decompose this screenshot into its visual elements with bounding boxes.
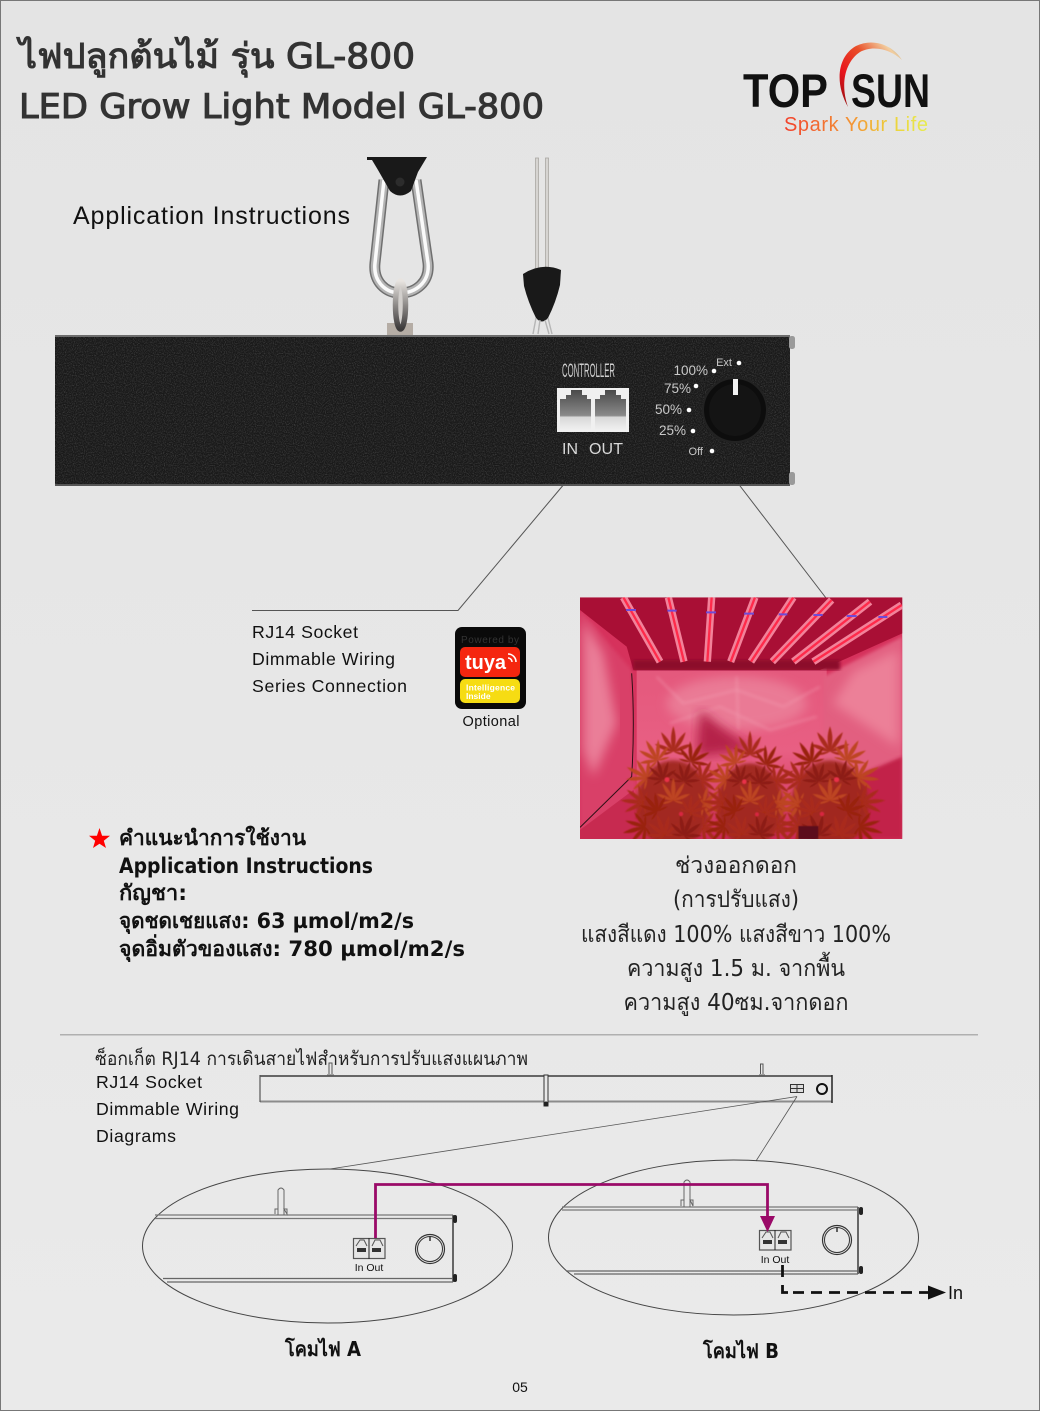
icon: rope ratchet hanger xyxy=(523,158,561,334)
sockets B xyxy=(760,1230,791,1266)
cannabis plants xyxy=(620,726,885,839)
controller sockets: IN xyxy=(562,441,578,458)
zoom lines from overview xyxy=(330,1096,797,1169)
diagram: lamp B detail xyxy=(548,1160,918,1315)
label: lamp B: โคมไฟ B xyxy=(702,1339,779,1363)
application instructions text: กัญชา: xyxy=(119,881,187,906)
flowering settings text: ช่วงออกดอก xyxy=(675,853,797,879)
flowering settings text xyxy=(581,853,891,1016)
diagram: lamp A detail xyxy=(142,1169,512,1323)
flowering settings text: แสงสีแดง 100% แสงสีขาว 100% xyxy=(581,922,891,948)
badge: tuya powered: Intelligence xyxy=(466,682,515,692)
product: light bar end panel xyxy=(55,335,795,486)
dimmer scale labels xyxy=(655,357,732,458)
arrow: dashed output to next lamp: In xyxy=(948,1283,963,1303)
logo: Topsun xyxy=(743,42,930,136)
badge: tuya powered: Inside xyxy=(466,691,491,701)
dimmer scale labels: Off xyxy=(689,446,704,458)
dimmer scale labels: 75% xyxy=(664,381,691,396)
back wall xyxy=(637,663,827,839)
controller sockets: OUT xyxy=(589,441,623,458)
badge: tuya powered: tuya xyxy=(465,652,507,674)
heading: application instructions: Application Instructions xyxy=(73,202,350,230)
application instructions text xyxy=(119,825,465,963)
dimmer scale labels: Ext xyxy=(716,357,732,369)
label: lamp A: โคมไฟ A xyxy=(284,1337,361,1361)
icon: hanging carabiner xyxy=(367,157,428,335)
dimmer scale labels: 25% xyxy=(659,423,686,438)
dimmer scale labels: 50% xyxy=(655,402,682,417)
knob B xyxy=(822,1226,852,1254)
dimmer knob xyxy=(703,378,767,442)
knob A xyxy=(416,1234,444,1264)
LED light bars xyxy=(623,597,902,662)
logo: Topsun: Spark Your Life xyxy=(784,114,928,136)
socket features text xyxy=(252,622,407,696)
title: LED Grow Light Model GL-800 xyxy=(19,87,544,127)
dimmer scale labels: 100% xyxy=(673,363,708,378)
ceiling xyxy=(580,597,902,670)
leader lines to sockets and photo xyxy=(252,482,826,610)
wiring diagram heading: Dimmable Wiring xyxy=(96,1099,239,1119)
bolts xyxy=(789,336,795,485)
title xyxy=(16,36,544,127)
socket features text: Dimmable Wiring xyxy=(252,649,395,669)
arrow: purple link from lamp A out to lamp B in xyxy=(376,1184,775,1238)
application instructions text: Application Instructions xyxy=(119,854,373,878)
application instructions text: คำแนะนำการใช้งาน xyxy=(119,825,307,850)
wiring diagram heading: Diagrams xyxy=(96,1126,176,1146)
badge: tuya powered xyxy=(455,627,526,730)
flowering settings text: ความสูง 40ซม.จากดอก xyxy=(624,990,848,1016)
application instructions text: จุดชดเชยแสง: 63 µmol/m2/s xyxy=(119,909,414,935)
sockets A: In Out xyxy=(355,1262,383,1274)
flowering settings text: (การปรับแสง) xyxy=(673,887,799,913)
wiring diagram heading: RJ14 Socket xyxy=(96,1072,202,1092)
diagram: full fixture overview xyxy=(260,1063,832,1106)
sockets A xyxy=(354,1238,385,1274)
logo: Topsun: TOP xyxy=(743,64,828,117)
flowering settings text: ความสูง 1.5 ม. จากพื้น xyxy=(627,952,845,982)
arrow: dashed output to next lamp xyxy=(782,1265,963,1303)
controller sockets: CONTROLLER xyxy=(562,361,615,382)
wiring diagram heading: ซ็อกเก็ต RJ14 การเดินสายไฟสำหรับการปรับแสงแผนภาพ xyxy=(95,1046,528,1070)
controller sockets xyxy=(557,361,629,458)
title: ไฟปลูกต้นไม้ รุ่น GL-800 xyxy=(16,36,415,77)
logo: Topsun: SUN xyxy=(851,64,930,117)
socket features text: Series Connection xyxy=(252,676,407,696)
side walls xyxy=(580,610,902,839)
icon: red star xyxy=(89,828,110,848)
application instructions text: จุดอิ่มตัวของแสง: 780 µmol/m2/s xyxy=(119,933,465,963)
badge: tuya powered: Powered by xyxy=(461,635,519,646)
sockets B: In Out xyxy=(761,1254,789,1266)
photo: red-lit grow tent xyxy=(580,597,902,850)
wiring diagram heading xyxy=(95,1046,528,1146)
page number: 05 xyxy=(512,1379,528,1395)
socket features text: RJ14 Socket xyxy=(252,622,358,642)
caption: Optional xyxy=(462,714,520,730)
